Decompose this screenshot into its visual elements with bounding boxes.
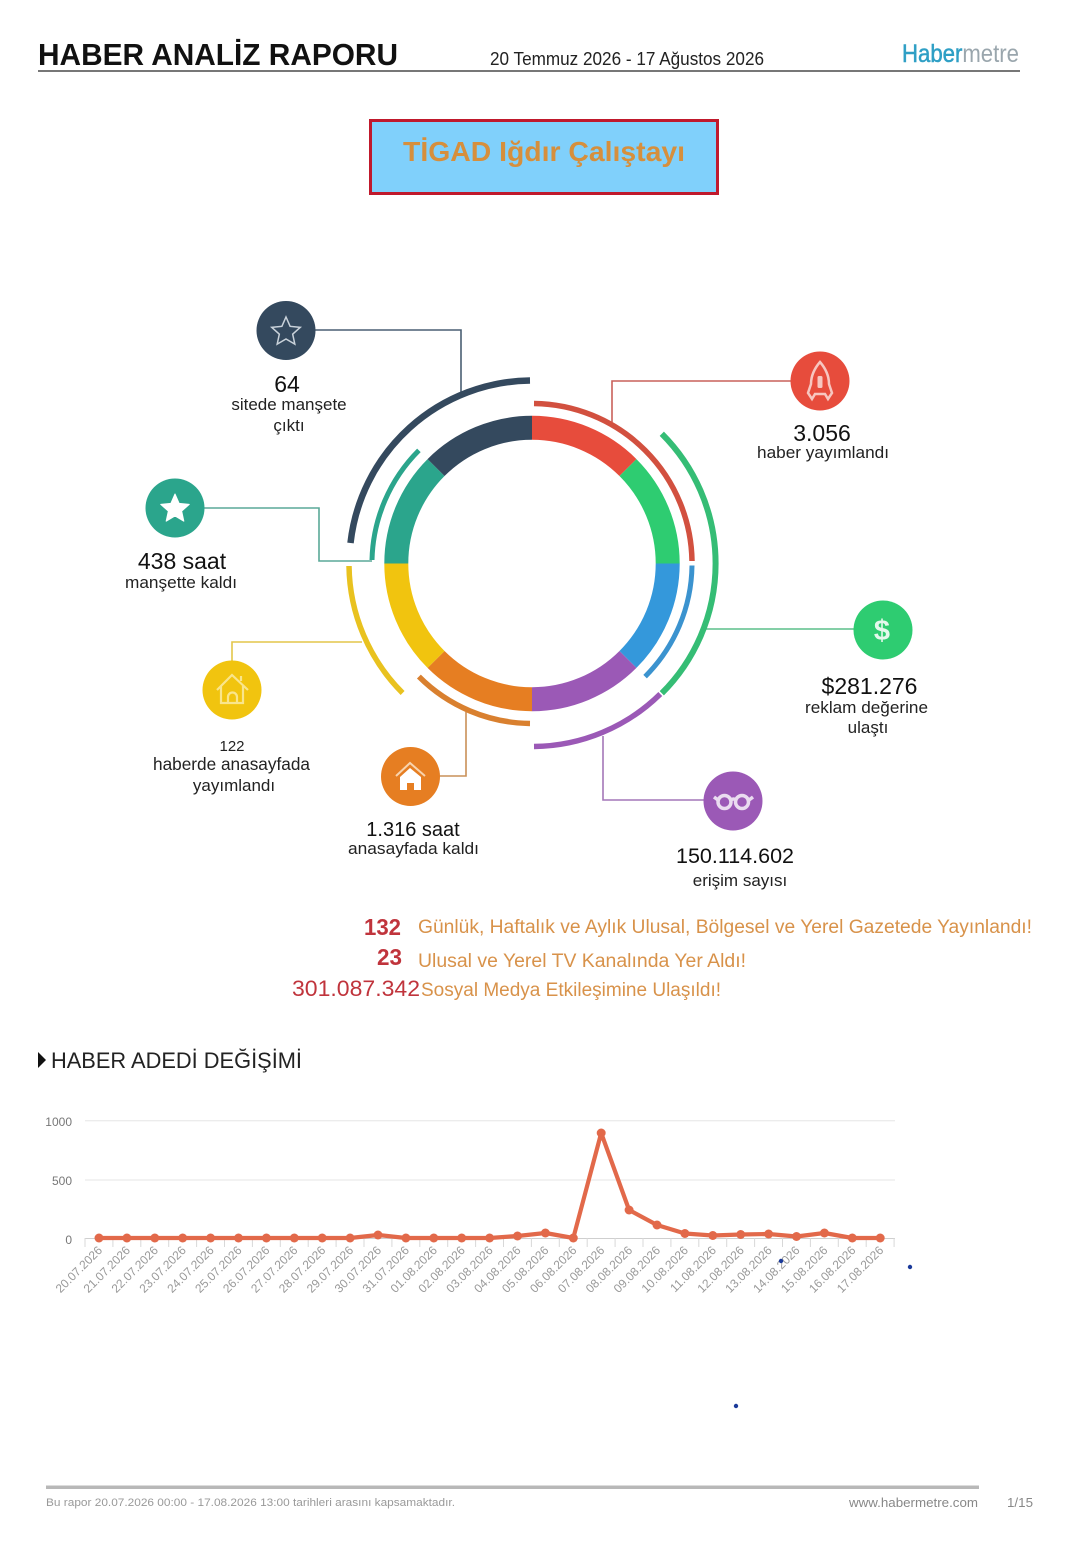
stats text block: Sosyal Medya Etkileşimine Ulaşıldı!	[421, 980, 721, 1001]
x axis date labels: 07.08.2026	[555, 1243, 608, 1296]
header	[38, 37, 1020, 72]
stats text block: 301.087.342	[292, 976, 420, 1001]
metric: erişim sayısı	[676, 772, 794, 890]
footer	[46, 1486, 1033, 1510]
x axis date labels: 04.08.2026	[471, 1243, 524, 1296]
icon: filled house	[381, 747, 440, 806]
footer: 1/15	[1007, 1495, 1033, 1510]
x axis date labels: 12.08.2026	[694, 1243, 747, 1296]
metric: haberde anasayfada: yayımlandı	[193, 776, 275, 795]
x axis date labels: 31.07.2026	[360, 1243, 412, 1296]
x axis date labels: 05.08.2026	[499, 1243, 552, 1296]
date range: 20 Temmuz 2026 - 17 Ağustos 2026	[490, 49, 764, 69]
metric: erişim sayısı: erişim sayısı	[693, 871, 787, 890]
y axis labels: 0	[65, 1233, 72, 1247]
report name box: TİGAD Iğdır Çalıştayı	[403, 136, 685, 167]
x axis date labels: 06.08.2026	[527, 1243, 580, 1296]
section heading: HABER ADEDİ DEĞİŞİMİ	[51, 1048, 302, 1073]
metric: reklam değeri: $281.276	[822, 673, 917, 699]
report name box	[370, 120, 718, 194]
x axis date labels	[53, 1243, 887, 1296]
y axis labels: 1000	[45, 1115, 72, 1129]
icon: outlined house	[202, 660, 262, 720]
metric: erişim sayısı: 150.114.602	[676, 845, 794, 868]
metric: anasayfada kaldı: anasayfada kaldı	[348, 839, 479, 858]
stats text block: Ulusal ve Yerel TV Kanalında Yer Aldı!	[418, 951, 746, 972]
metric: manşette kaldı: manşette kaldı	[125, 573, 237, 592]
metric: haberde anasayfada	[153, 660, 310, 795]
metric: haber yayımlandı: 3.056	[793, 420, 851, 446]
x axis date labels: 01.08.2026	[388, 1243, 440, 1296]
x axis date labels: 29.07.2026	[304, 1243, 356, 1296]
metric: manşette kaldı	[125, 478, 237, 592]
icon: rocket	[790, 352, 850, 410]
x axis date labels: 17.08.2026	[834, 1243, 887, 1296]
line chart	[45, 1115, 895, 1296]
donut ring	[396, 428, 668, 699]
x axis date labels: 16.08.2026	[806, 1243, 859, 1296]
metric: haber yayımlandı: haber yayımlandı	[757, 443, 889, 462]
metric: haberde anasayfada: 122	[219, 738, 245, 755]
y axis labels: 500	[52, 1174, 72, 1188]
footer: www.habermetre.com	[848, 1495, 978, 1510]
metric: sitede manşete: 64	[274, 371, 300, 397]
icon: glasses	[704, 772, 762, 830]
x axis date labels: 10.08.2026	[639, 1243, 691, 1296]
metric: haberde anasayfada: haberde anasayfada	[153, 754, 310, 774]
x axis date labels: 22.07.2026	[109, 1243, 161, 1296]
x axis date labels: 30.07.2026	[332, 1243, 384, 1296]
metric: reklam değeri: ulaştı	[848, 718, 888, 737]
x axis date labels: 08.08.2026	[583, 1243, 635, 1296]
outer arcs	[349, 380, 716, 746]
logo: Habermetre: Habermetre	[902, 40, 1019, 68]
y axis labels	[45, 1115, 72, 1247]
x axis date labels: 26.07.2026	[220, 1243, 273, 1296]
x axis date labels: 09.08.2026	[611, 1243, 663, 1296]
x axis date labels: 24.07.2026	[164, 1243, 217, 1296]
x axis date labels: 28.07.2026	[276, 1243, 329, 1296]
stats text block: 23	[377, 944, 402, 970]
stats text block: 132	[364, 914, 401, 940]
icon: dollar: $	[874, 615, 890, 647]
x axis date labels: 23.07.2026	[136, 1243, 189, 1296]
x axis date labels: 03.08.2026	[443, 1243, 496, 1296]
stats text block	[292, 914, 1032, 1001]
icon: filled star	[146, 478, 204, 538]
connector lines	[175, 330, 883, 800]
x axis date labels: 21.07.2026	[81, 1243, 133, 1296]
metric: reklam değeri: reklam değerine	[805, 698, 928, 717]
x axis date labels: 11.08.2026	[667, 1243, 719, 1295]
title: HABER ANALİZ RAPORU	[38, 37, 398, 72]
metric: anasayfada kaldı	[348, 747, 479, 858]
icon: outlined star	[256, 301, 316, 360]
footer: Bu rapor 20.07.2026 00:00 - 17.08.2026 13:00 tarihleri arasını kapsamaktadır.	[46, 1497, 455, 1509]
data line	[99, 1133, 880, 1238]
x axis date labels: 15.08.2026	[778, 1243, 831, 1296]
stats text block: Günlük, Haftalık ve Aylık Ulusal, Bölgesel ve Yerel Gazetede Yayınlandı!	[418, 917, 1032, 938]
metric: anasayfada kaldı: 1.316 saat	[366, 819, 460, 841]
metric: sitede manşete	[231, 301, 347, 435]
x axis date labels: 14.08.2026	[750, 1243, 803, 1296]
x axis date labels: 13.08.2026	[722, 1243, 775, 1296]
x axis date labels: 02.08.2026	[415, 1243, 468, 1296]
x axis date labels: 25.07.2026	[192, 1243, 245, 1296]
metric: sitede manşete: çıktı	[273, 416, 305, 435]
metric: sitede manşete: sitede manşete	[231, 395, 347, 414]
metric: manşette kaldı: 438 saat	[138, 548, 227, 574]
data points	[94, 1128, 885, 1242]
panel: radial metrics diagram	[125, 301, 928, 890]
metric: haber yayımlandı	[757, 352, 889, 462]
x axis date labels: 20.07.2026	[53, 1243, 105, 1296]
metric: reklam değeri	[805, 600, 928, 737]
x axis date labels: 27.07.2026	[248, 1243, 301, 1296]
